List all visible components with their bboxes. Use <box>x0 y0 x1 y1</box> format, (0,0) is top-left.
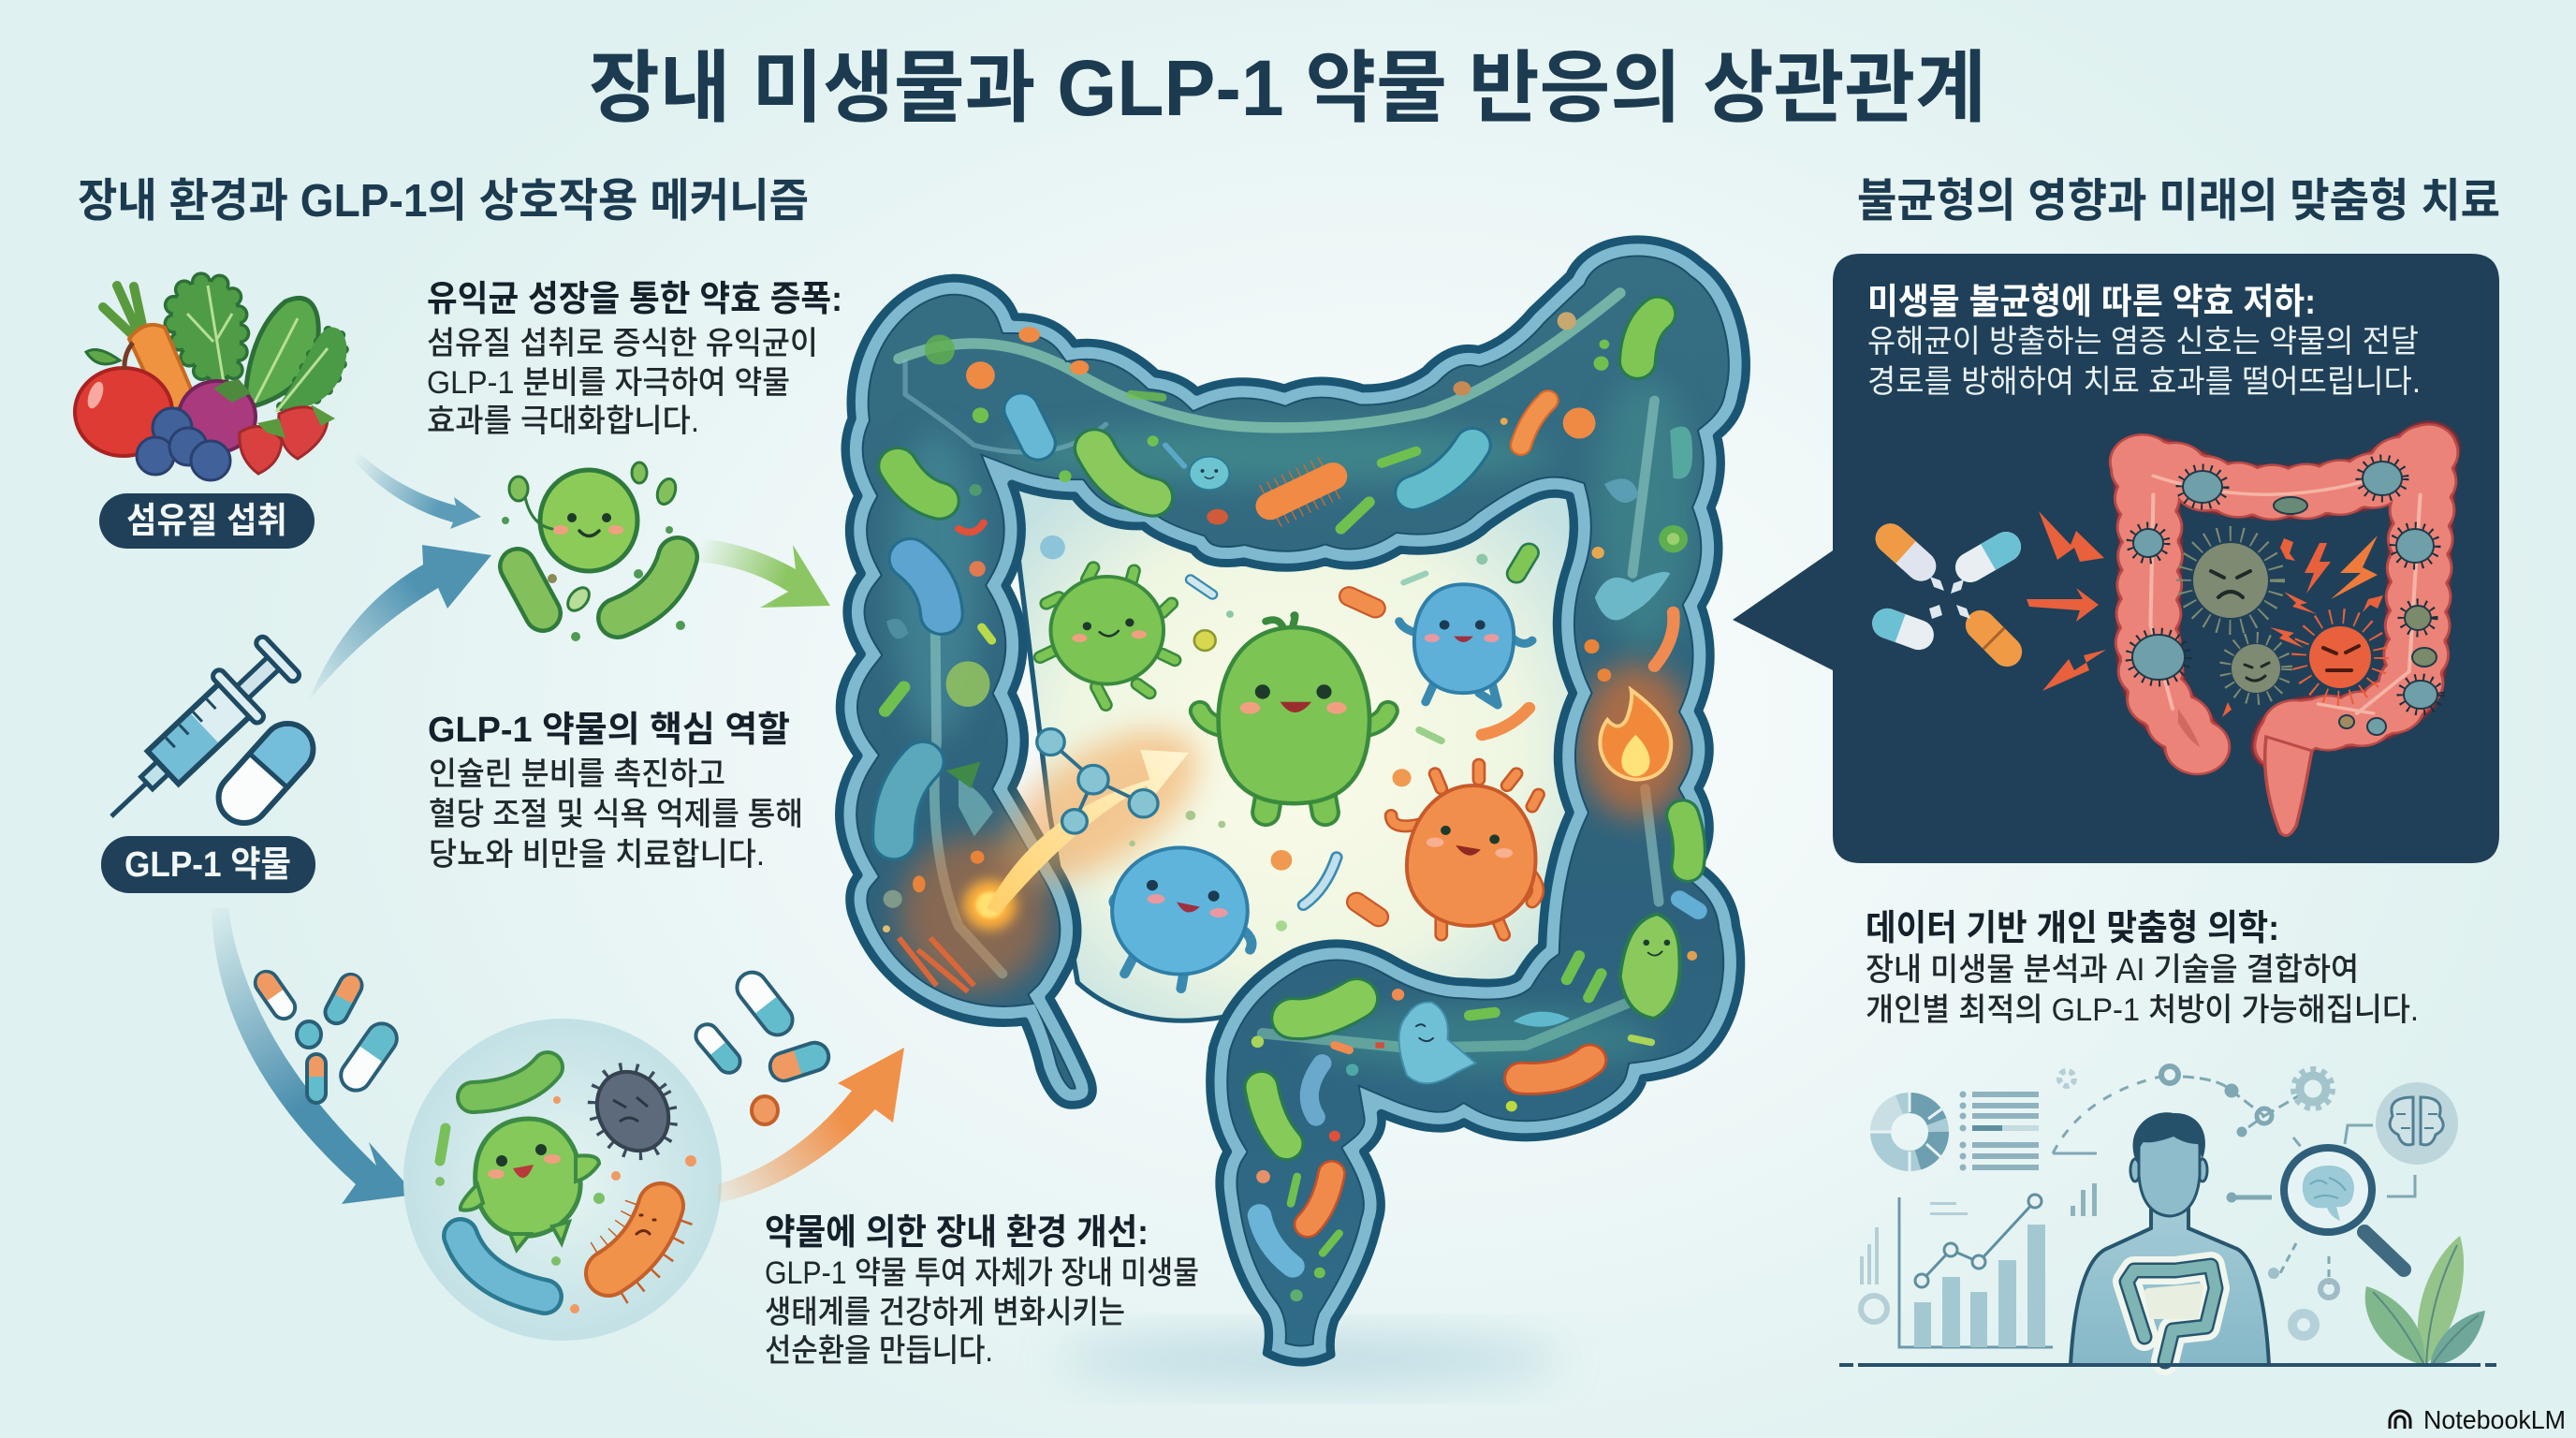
text block: GLP-1 role: 혈당 조절 및 식욕 억제를 통해 <box>429 797 803 832</box>
bar and line chart <box>1860 1183 2097 1347</box>
shadow under colon <box>1058 1339 1563 1380</box>
character: orange <box>1391 765 1539 935</box>
network nodes <box>2053 1066 2415 1336</box>
icon: germs <box>2129 458 2441 735</box>
arrow: green to colon <box>698 538 830 608</box>
sub: grey bad bacterium <box>580 1056 685 1167</box>
icon: scattered pills left <box>251 967 402 1103</box>
arrow: orange to colon <box>718 1048 904 1203</box>
character: blue lower <box>1112 847 1251 989</box>
title: 장내 미생물과 GLP-1 약물 반응의 상관관계 <box>589 44 1986 132</box>
text block: drug effect on gut: 약물에 의한 장내 환경 개선: <box>765 1213 1149 1253</box>
ground line <box>1839 1363 2496 1367</box>
text block: GLP-1 role: GLP-1 약물의 핵심 역할 <box>428 711 790 750</box>
donut chart <box>1870 1092 1945 1172</box>
text block: drug effect on gut <box>765 1213 1199 1369</box>
text block: drug effect on gut: 생태계를 건강하게 변화시키는 <box>765 1295 1125 1330</box>
panel body text: 경로를 방해하여 치료 효과를 떨어뜨립니다. <box>1867 364 2421 400</box>
text block: drug effect on gut: GLP-1 약물 투여 자체가 장내 미생물 <box>765 1255 1199 1291</box>
blueberries <box>137 408 230 480</box>
floating particles in centre <box>1191 574 1530 917</box>
badge: GLP-1 drug <box>101 836 315 893</box>
carrot <box>103 286 193 419</box>
gut outline <box>2127 1266 2216 1361</box>
text block: personalised medicine: 개인별 최적의 GLP-1 처방이 가능해집니다. <box>1866 992 2419 1028</box>
microbes inside colon wall <box>886 314 1698 1267</box>
logo: NotebookLM: NotebookLM <box>2423 1405 2566 1434</box>
character: blue upper <box>1399 584 1532 705</box>
badge: fibre intake <box>99 493 315 549</box>
text block: personalised medicine: 장내 미생물 분석과 AI 기술을 결합하여 <box>1866 952 2359 988</box>
colon body <box>840 240 1746 1362</box>
text block: personalised medicine: 데이터 기반 개인 맞춤형 의학: <box>1866 909 2279 948</box>
panel heading: 미생물 불균형에 따른 약효 저하: <box>1867 283 2316 322</box>
text block: good bacteria growth: 유익균 성장을 통한 약효 증폭: <box>427 280 842 319</box>
sub: happy green bacterium <box>461 1119 599 1250</box>
icon: capsule <box>208 713 324 833</box>
text block: GLP-1 role <box>428 711 803 873</box>
icon: syringe <box>88 630 305 841</box>
text block: good bacteria growth: 섬유질 섭취로 증식한 유익균이 <box>427 326 818 361</box>
microbe: blue ghost <box>1399 1002 1476 1083</box>
arrow: fibre to good bacteria <box>352 453 481 529</box>
leaf: spinach large <box>173 282 344 412</box>
icon: pills blocked <box>1868 518 2028 673</box>
text block: drug effect on gut: 선순환을 만듭니다. <box>765 1333 993 1369</box>
icon: good bacteria cluster <box>502 462 685 641</box>
badge: GLP-1 drug: GLP-1 약물 <box>124 845 291 885</box>
text block: good bacteria growth: GLP-1 분비를 자극하여 약물 <box>427 365 790 401</box>
small particles in colon <box>883 312 1697 1301</box>
badge: fibre intake: 섬유질 섭취 <box>126 502 287 541</box>
icon: scattered pills right <box>692 966 832 1124</box>
arrow: GLP-1 drug to microbiome bubble <box>212 908 416 1204</box>
microbe: teal small face in colon <box>1189 457 1229 490</box>
panel body text: 유해균이 방출하는 염증 신호는 약물의 전달 <box>1867 324 2419 360</box>
panel: imbalance <box>1733 254 2499 863</box>
section heading: left: 장내 환경과 GLP-1의 상호작용 메커니즘 <box>78 176 809 227</box>
sub: orange bad bacterium <box>608 1206 661 1273</box>
text block: personalised medicine <box>1866 909 2419 1028</box>
beet <box>179 379 256 452</box>
icon: inflamed colon <box>2143 448 2428 836</box>
icon: flame <box>1600 690 1671 780</box>
plant <box>2365 1236 2485 1365</box>
icon: inflammation bolts <box>2222 536 2383 717</box>
text block: GLP-1 role: 당뇨와 비만을 치료합니다. <box>429 837 765 873</box>
arrow: GLP-1 to good bacteria <box>309 545 491 700</box>
illustration: large colon with microbes <box>840 240 1746 1362</box>
orange glow arrow <box>963 701 1224 930</box>
icon: fibre food group <box>75 282 344 480</box>
strawberries <box>240 404 335 474</box>
apple <box>75 343 172 456</box>
microbe: green smiling bean <box>1620 914 1680 1019</box>
list bars <box>1960 1092 2039 1170</box>
magnifier <box>2284 1148 2404 1269</box>
section heading: right: 불균형의 영향과 미래의 맞춤형 치료 <box>1857 176 2500 227</box>
text block: good bacteria growth: 효과를 극대화합니다. <box>427 404 699 439</box>
text block: GLP-1 role: 인슐린 분비를 촉진하고 <box>429 756 725 792</box>
colon centre window <box>1009 478 1576 1020</box>
icon: angry germs <box>2184 534 2381 699</box>
icon: lightning and arrow <box>2027 511 2106 691</box>
character: big green <box>1200 615 1388 813</box>
brain circle <box>2376 1082 2458 1165</box>
illustration: data driven medicine <box>1839 1066 2496 1365</box>
icon: microbiome bubble <box>403 1019 722 1341</box>
person with gut <box>2071 1112 2269 1365</box>
character: green spiky <box>1040 567 1175 705</box>
molecule <box>1037 729 1158 833</box>
text block: good bacteria growth <box>427 280 842 439</box>
panel body text <box>1867 324 2421 400</box>
